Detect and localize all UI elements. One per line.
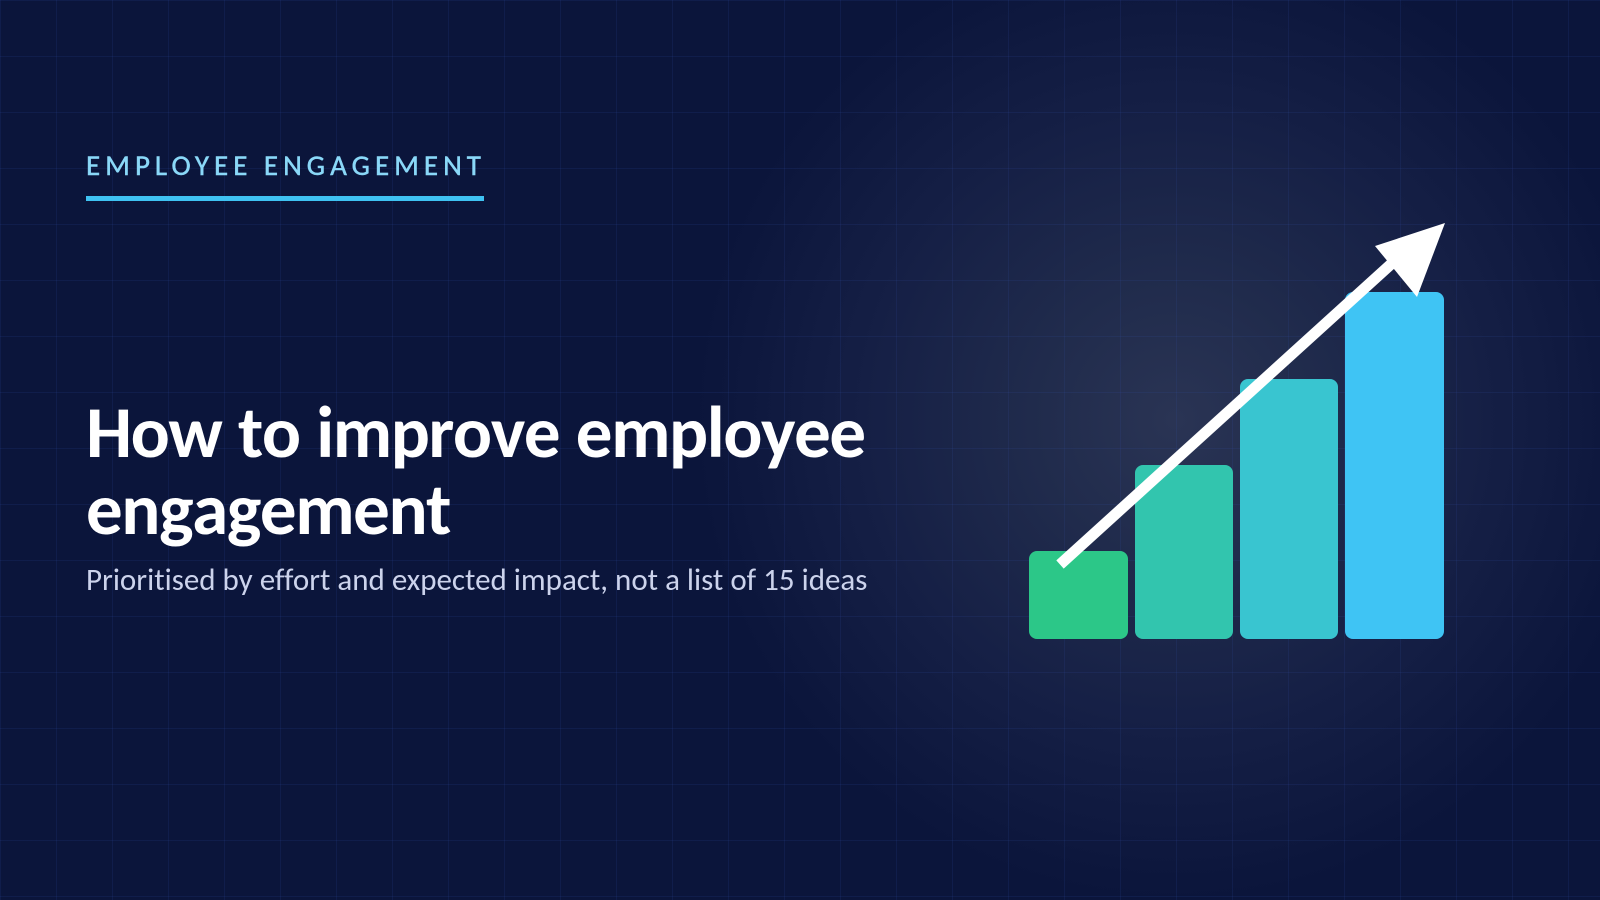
subtitle: Prioritised by effort and expected impact, not a list of 15 ideas — [86, 561, 867, 599]
bar 3 — [1240, 379, 1338, 639]
eyebrow underline — [86, 196, 484, 201]
bar 2 — [1135, 465, 1233, 639]
title: engagement — [86, 464, 450, 554]
bar 1 — [1029, 551, 1128, 639]
title: How to improve employee — [86, 387, 865, 477]
title — [86, 387, 865, 554]
bar 4 — [1345, 292, 1444, 639]
arrow — [1060, 223, 1445, 564]
eyebrow label: EMPLOYEE ENGAGEMENT — [86, 147, 486, 183]
